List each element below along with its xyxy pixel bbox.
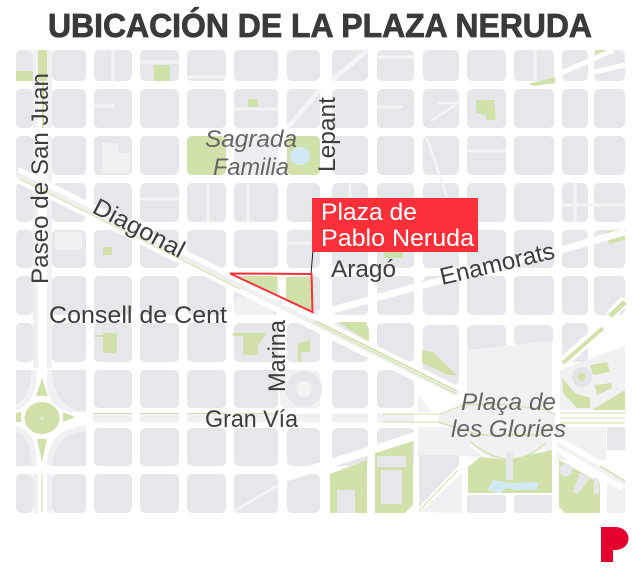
place label: Plaça de les Glories: Plaça de — [461, 389, 556, 416]
street label: Marina: Marina — [264, 319, 291, 392]
Plaça de les Glories plaza — [418, 341, 555, 464]
minor passages — [95, 50, 625, 512]
leader line — [311, 250, 313, 274]
light strips beside Paseo de San Juan — [33, 50, 52, 513]
icon: publisher logo P — [601, 527, 628, 562]
Glories park — [419, 450, 552, 513]
place label: Plaça de les Glories — [451, 389, 566, 443]
title: UBICACIÓN DE LA PLAZA NERUDA — [48, 7, 592, 44]
street label: Lepant: Lepant — [314, 97, 341, 172]
Diagonal avenue — [16, 174, 625, 484]
water at Sagrada Familia — [290, 147, 310, 165]
place label: Sagrada Familia: Familia — [213, 154, 289, 181]
rotunda block at Marina — [280, 370, 322, 408]
street label: Consell de Cent: Consell de Cent — [49, 302, 227, 329]
parks and green areas — [16, 50, 625, 513]
blocks north of the Glories plaza — [467, 325, 506, 351]
secondary diagonal roads — [278, 50, 625, 480]
street label: Paseo de San Juan: Paseo de San Juan — [27, 73, 54, 284]
curved blocks around the roundabout — [16, 370, 86, 466]
place label: Plaça de les Glories: les Glories — [451, 416, 566, 443]
map of the area — [16, 50, 625, 513]
roundabout — [16, 378, 75, 512]
street label: Diagonal: Diagonal — [88, 193, 189, 264]
tall block north of the Glories — [423, 325, 459, 385]
callout: Plaza de Pablo Neruda — [312, 198, 478, 252]
right side district — [556, 345, 625, 513]
street label: Enamorats: Enamorats — [437, 238, 557, 291]
light building blocks — [55, 136, 278, 315]
highlighted triangle for Plaza Neruda — [230, 274, 312, 312]
place label: Sagrada Familia: Sagrada — [205, 126, 297, 153]
buildings on parks — [337, 456, 599, 513]
callout: Plaza de Pablo Neruda: Plaza de — [321, 199, 417, 226]
city blocks — [16, 50, 625, 513]
place label: Sagrada Familia — [205, 126, 297, 181]
street label: Gran Vía: Gran Vía — [205, 406, 299, 433]
Gran Via avenue — [93, 413, 625, 423]
callout: Plaza de Pablo Neruda: Pablo Neruda — [321, 225, 475, 252]
street label: Aragó: Aragó — [331, 256, 396, 283]
